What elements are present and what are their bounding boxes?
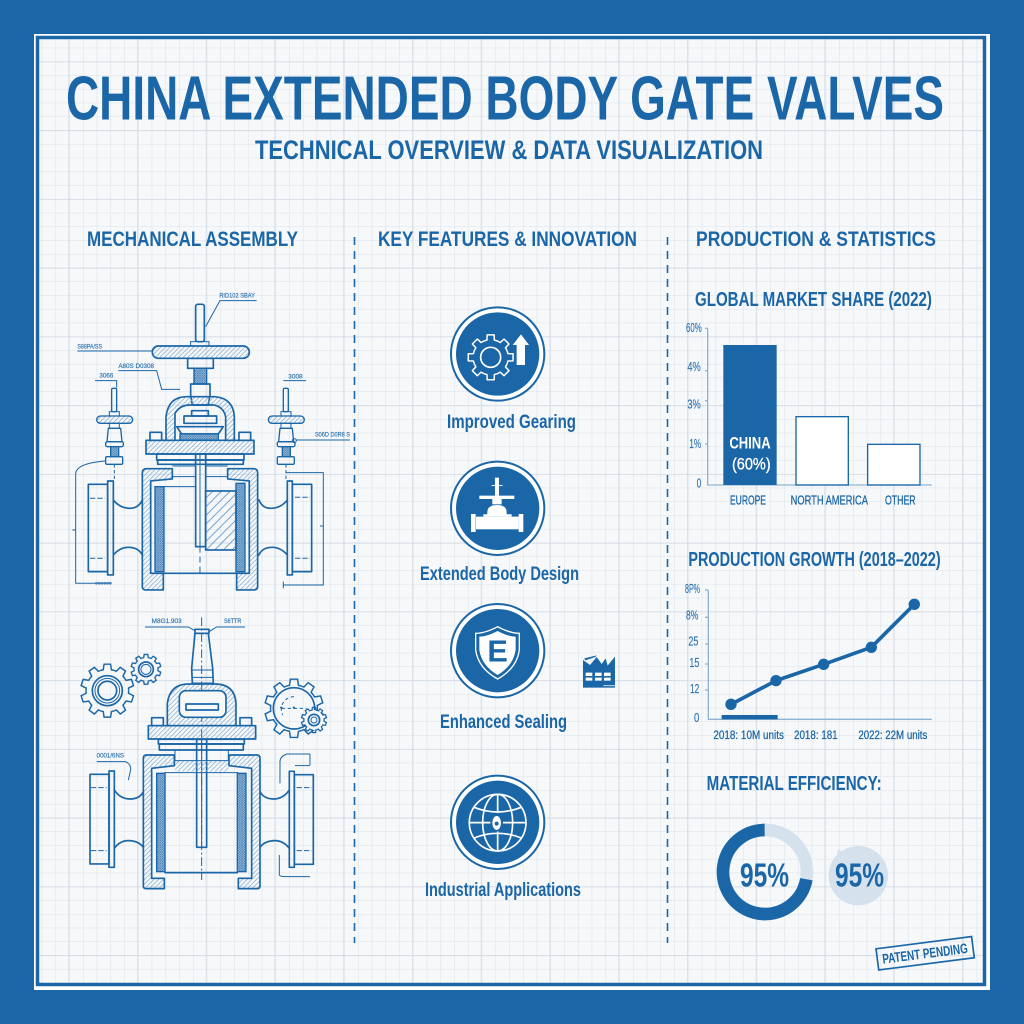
x axis labels: 2018: 181 — [794, 728, 838, 742]
part labels: M8G1.903 — [152, 618, 182, 625]
axes — [705, 590, 932, 719]
label: extended body design: Extended Body Design — [420, 564, 579, 585]
gears upper right — [264, 679, 327, 737]
part labels: 0001/6NS — [97, 752, 125, 759]
column heading: production and statistics: PRODUCTION & STATISTICS — [696, 228, 936, 251]
part labels: S06D D0R8 S — [315, 432, 350, 439]
y axis labels: 0 — [694, 711, 699, 725]
x axis labels: 2018: 10M units — [713, 728, 784, 742]
y axis labels — [686, 320, 702, 491]
badge 95%: 95% — [835, 858, 884, 895]
donut chart 95% — [716, 823, 814, 921]
bar: China: CHINA — [729, 433, 771, 452]
patent pending stamp: PATENT PENDING — [881, 940, 969, 967]
x axis labels: 2022: 22M units — [858, 728, 927, 742]
icon: factory — [583, 655, 617, 688]
donut chart 95%: 95% — [740, 858, 789, 895]
x axis labels — [730, 493, 916, 507]
bar: North America — [796, 417, 848, 485]
diagram: gate valve assembly with side valves — [72, 292, 350, 590]
material efficiency section — [707, 773, 974, 970]
bar: China — [723, 345, 777, 485]
part labels: 000000 — [95, 580, 113, 585]
y axis labels: 8% — [686, 609, 698, 623]
icon: improved gearing — [451, 307, 544, 401]
central stem and handwheel — [152, 304, 249, 405]
bonnet — [152, 684, 252, 726]
part labels: A80S D0308 — [118, 363, 154, 370]
leader lines — [72, 301, 350, 588]
part labels — [97, 618, 241, 759]
gears upper left — [80, 654, 161, 717]
part labels: RID102 SBAY — [219, 292, 255, 299]
bar: China: (60%) — [732, 454, 771, 473]
label: improved gearing: Improved Gearing — [447, 412, 576, 433]
icon: enhanced sealing: E — [487, 635, 508, 669]
patent pending stamp — [876, 937, 974, 970]
growth line — [725, 599, 920, 710]
x axis labels: NORTH AMERICA — [791, 493, 868, 507]
y axis labels: 12 — [690, 682, 699, 696]
badge 95% — [829, 846, 888, 905]
left and right pipe ends — [88, 481, 312, 575]
x axis labels — [713, 728, 927, 742]
y axis labels — [685, 582, 700, 725]
x axis labels: OTHER — [885, 493, 916, 507]
diagram: gate valve with gears — [80, 617, 327, 889]
part labels: S6TTR — [224, 618, 241, 625]
bar: Other — [868, 444, 920, 485]
flange plates and stem — [148, 726, 256, 847]
y axis labels: 25 — [688, 635, 698, 649]
y axis labels: 60% — [686, 320, 702, 335]
icon: industrial applications — [451, 776, 544, 869]
valve body walls — [143, 750, 260, 889]
axes — [705, 328, 932, 485]
chart title: GLOBAL MARKET SHARE (2022) — [695, 288, 932, 311]
y axis labels: 4% — [687, 359, 701, 374]
part labels: 3008 — [288, 373, 303, 380]
valve body walls — [142, 466, 258, 590]
flange plates — [146, 440, 254, 464]
y axis labels: 1% — [689, 436, 701, 451]
y axis labels: 15 — [689, 656, 699, 670]
line chart: production growth — [685, 548, 941, 742]
icon: extended body design — [451, 462, 544, 555]
x axis labels: EUROPE — [730, 493, 766, 507]
part labels: S88PA/SS — [77, 343, 102, 350]
column heading: mechanical assembly: MECHANICAL ASSEMBLY — [87, 228, 298, 251]
part labels: 3066 — [99, 373, 114, 380]
part labels — [77, 292, 350, 585]
bar chart: global market share — [686, 288, 932, 507]
y axis labels: 3% — [687, 397, 701, 412]
left and right pipe ends — [90, 771, 313, 867]
y axis labels: 0 — [697, 476, 701, 491]
icon: enhanced sealing — [451, 604, 544, 697]
section heading: MATERIAL EFFICIENCY: — [707, 773, 882, 795]
leader lines — [97, 627, 310, 877]
y axis labels: 8P% — [685, 582, 700, 596]
small side valves — [97, 388, 304, 480]
stem and gate wedge — [196, 454, 236, 577]
spindle top — [192, 617, 213, 880]
label: enhanced sealing: Enhanced Sealing — [440, 712, 567, 733]
label: industrial applications: Industrial Applications — [425, 880, 581, 901]
baseline bar — [722, 715, 778, 719]
bonnet — [150, 397, 251, 440]
subtitle: TECHNICAL OVERVIEW & DATA VISUALIZATION — [255, 135, 763, 165]
column heading: key features: KEY FEATURES & INNOVATION — [378, 228, 637, 251]
